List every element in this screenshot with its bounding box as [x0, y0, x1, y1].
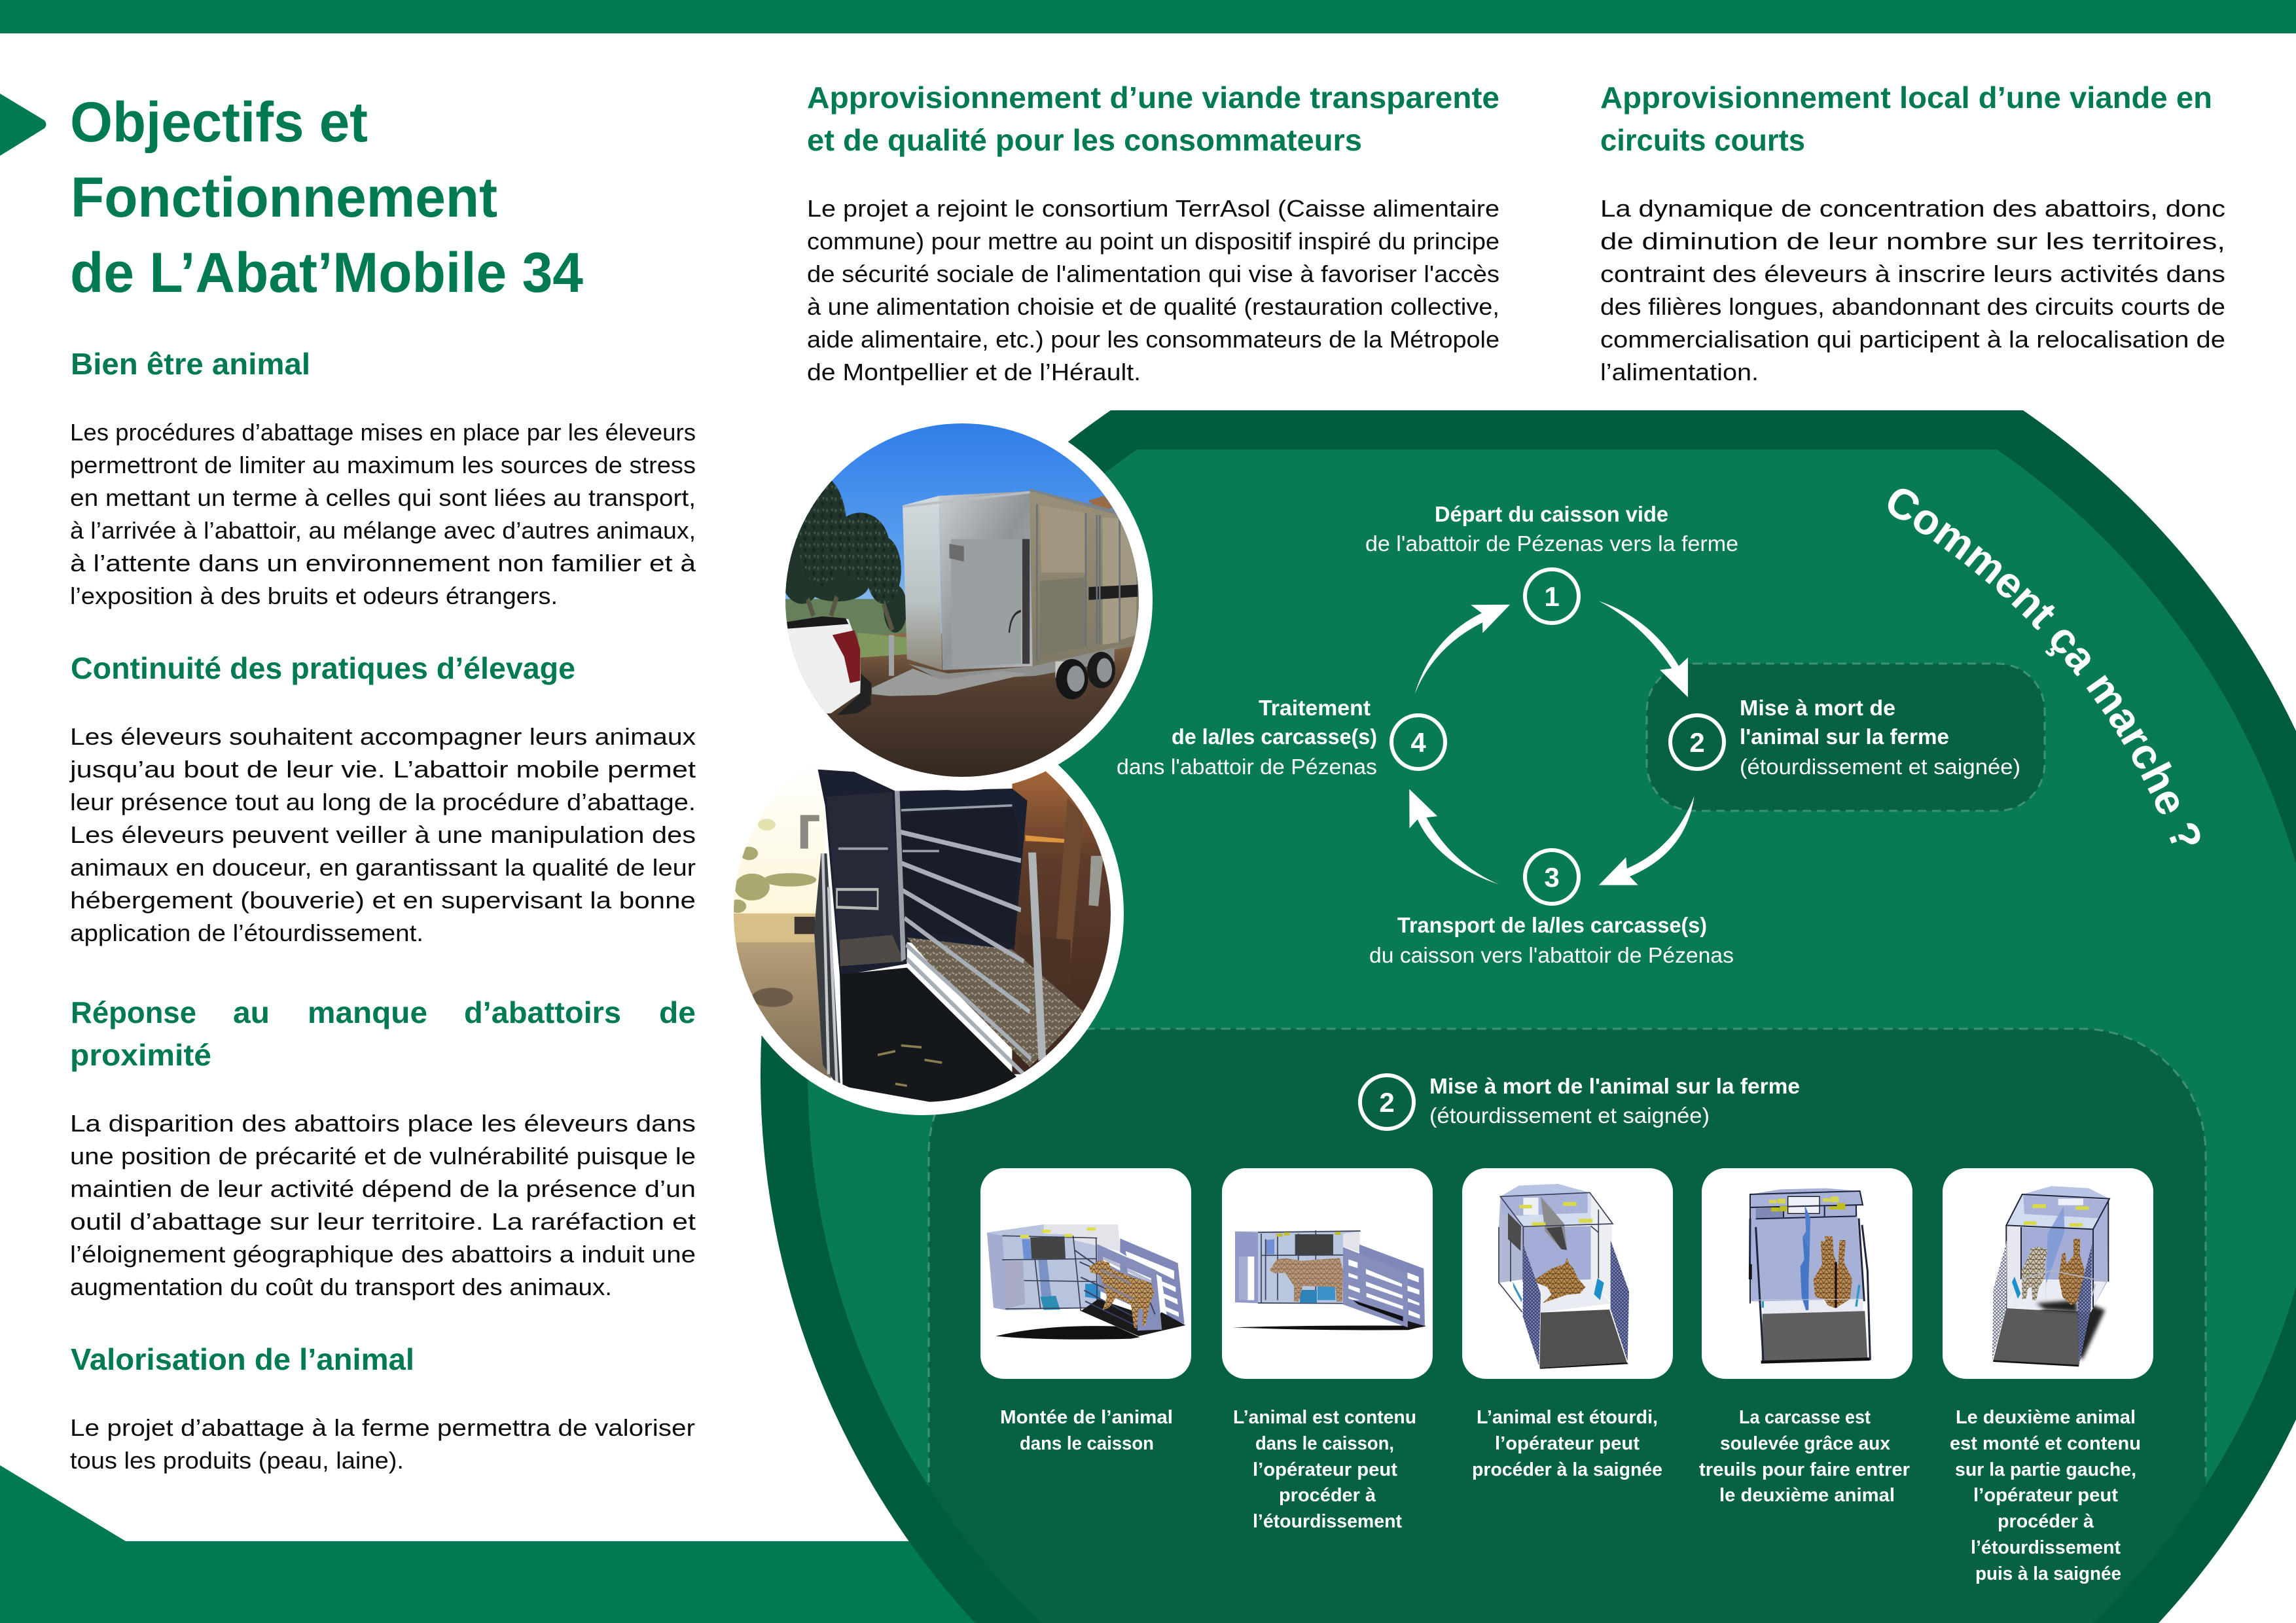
caption card 2: l’opérateur peut	[1253, 1459, 1397, 1480]
step 3 label: Transport de la/les carcasse(s)	[1397, 913, 1707, 937]
text block: continuité des pratiques: application de l’étourdissement.	[70, 919, 423, 946]
text block: bien être animal: l’exposition à des bruits et odeurs étrangers.	[70, 582, 558, 609]
heading: détail étape 2	[1360, 1074, 1800, 1129]
text block: bien être animal: en mettant un terme à celles qui sont liées au transport,	[70, 484, 696, 511]
text block: approvisionnement local: commercialisation qui participent à la relocalisation de	[1600, 326, 2225, 353]
heading: détail étape 2: (étourdissement et saignée)	[1429, 1103, 1710, 1128]
caption card 3	[1472, 1407, 1662, 1480]
caption card 2: L’animal est contenu	[1233, 1407, 1416, 1428]
step 1 label: Départ du caisson vide	[1435, 502, 1668, 526]
heading: approvisionnement local: circuits courts	[1600, 123, 1805, 157]
cycle diagram	[1117, 502, 2020, 967]
heading: réponse au manque d'abattoirs: au	[233, 995, 270, 1029]
text block: réponse au manque d'abattoirs: augmentation du coût du transport des animaux.	[70, 1274, 612, 1300]
text block: bien être animal: à l’arrivée à l’abattoir, au mélange avec d’autres animaux,	[70, 517, 696, 544]
text block: réponse au manque d'abattoirs: outil d’abattage sur leur territoire. La raréfaction et	[70, 1208, 696, 1235]
caption card 5: Le deuxième animal	[1956, 1407, 2136, 1428]
top green band	[0, 0, 2296, 33]
caption card 2: dans le caisson,	[1255, 1433, 1394, 1454]
heading: bien être animal: Bien être animal	[71, 347, 310, 381]
panel: comment ça marche background disc	[761, 410, 2296, 1623]
step 1 badge: 1	[1544, 581, 1560, 612]
caption card 5: est monté et contenu	[1950, 1433, 2141, 1454]
step 4 label: dans l'abattoir de Pézenas	[1117, 755, 1377, 779]
step 4 label	[1117, 696, 1377, 779]
card 2: animal contenu	[1222, 1168, 1433, 1379]
title	[70, 91, 583, 304]
step 4 label: Traitement	[1259, 696, 1371, 720]
caption card 5: l’opérateur peut	[1973, 1485, 2118, 1506]
text block: approvisionnement transparent: Le projet a rejoint le consortium TerrAsol (Caisse alimentaire	[807, 195, 1499, 222]
text block: continuité des pratiques: leur présence tout au long de la procédure d’abattage.	[70, 789, 696, 815]
caption card 3: procéder à la saignée	[1472, 1459, 1662, 1480]
caption card 3: L’animal est étourdi,	[1477, 1407, 1658, 1428]
text block: continuité des pratiques: hébergement (bouverie) et en supervisant la bonne	[70, 887, 696, 914]
caption card 5: l’étourdissement	[1971, 1537, 2121, 1558]
heading: approvisionnement local: Approvisionnement local d’une viande en	[1600, 80, 2212, 115]
card 4: carcasse soulevée	[1702, 1168, 1912, 1379]
text block: approvisionnement local: des filières longues, abandonnant des circuits courts de	[1600, 293, 2225, 320]
heading: valorisation de l'animal: Valorisation de l’animal	[71, 1342, 414, 1376]
illustration: animal contenu dans le caisson	[1233, 1230, 1426, 1330]
heading: comment ça marche: Comment ça marche ?	[1888, 488, 2200, 844]
text block: réponse au manque d'abattoirs: La disparition des abattoirs place les éleveurs dans	[70, 1110, 696, 1137]
step 3 label	[1369, 913, 1734, 967]
caption card 4: La carcasse est	[1739, 1407, 1871, 1428]
text block: continuité des pratiques: Les éleveurs souhaitent accompagner leurs animaux	[70, 723, 696, 750]
step 2 badge	[1670, 715, 1724, 769]
caption card 1	[1000, 1407, 1173, 1454]
caption card 5	[1950, 1407, 2141, 1584]
text block: approvisionnement local	[1600, 195, 2225, 385]
caption card 1: Montée de l’animal	[1000, 1407, 1173, 1428]
step 1 label: de l'abattoir de Pézenas vers la ferme	[1365, 531, 1738, 556]
text block: bien être animal: Les procédures d’abattage mises en place par les éleveurs	[70, 419, 696, 446]
caption card 2: procéder à	[1279, 1485, 1376, 1506]
heading: détail étape 2: 2	[1379, 1087, 1395, 1118]
step 2 label: (étourdissement et saignée)	[1740, 755, 2020, 779]
caption card 4: treuils pour faire entrer	[1699, 1459, 1910, 1480]
title arrow marker	[0, 94, 46, 156]
step 2 label: l'animal sur la ferme	[1740, 724, 1949, 749]
caption card 2: l’étourdissement	[1253, 1511, 1402, 1532]
text block: approvisionnement local: contraint des éleveurs à inscrire leurs activités dans	[1600, 260, 2225, 287]
text block: valorisation de l'animal: tous les produits (peau, laine).	[70, 1447, 404, 1474]
text block: bien être animal	[70, 419, 696, 609]
illustration: animal montant dans le caisson	[987, 1224, 1185, 1340]
text block: réponse au manque d'abattoirs: l’éloignement géographique des abattoirs a induit une	[70, 1241, 696, 1268]
arrows between the cycle steps	[1409, 601, 1695, 885]
text block: continuité des pratiques: animaux en douceur, en garantissant la qualité de leur	[70, 854, 696, 881]
heading: réponse au manque d'abattoirs: Réponse	[71, 995, 196, 1029]
heading: détail étape 2: Mise à mort de l'animal sur la ferme	[1429, 1074, 1800, 1098]
illustration: animal étourdi au sol	[1499, 1184, 1629, 1369]
caption card 5: sur la partie gauche,	[1955, 1459, 2136, 1480]
text block: bien être animal: à l’attente dans un environnement non familier et à	[70, 550, 696, 577]
heading: approvisionnement transparent: et de qualité pour les consommateurs	[807, 123, 1362, 157]
text block: approvisionnement transparent: à une alimentation choisie et de qualité (restauration collective,	[807, 293, 1499, 320]
illustration: deuxième animal contenu à gauche	[1992, 1186, 2109, 1366]
text block: approvisionnement transparent: commune) pour mettre au point un dispositif inspiré du principe	[807, 228, 1499, 255]
card 1: montée de l'animal	[980, 1168, 1191, 1379]
panel: détail mise à mort	[929, 1029, 2206, 1623]
step 4 badge: 4	[1410, 727, 1426, 758]
text block: approvisionnement transparent: de Montpellier et de l’Hérault.	[807, 359, 1141, 385]
caption card 4: soulevée grâce aux	[1720, 1433, 1890, 1454]
heading: réponse au manque d'abattoirs: de	[659, 995, 696, 1029]
step 3 badge	[1525, 850, 1579, 904]
heading: réponse au manque d'abattoirs: manque	[308, 995, 427, 1029]
text block: approvisionnement transparent	[807, 195, 1499, 385]
heading: réponse au manque d'abattoirs	[70, 995, 696, 1072]
caption card 4	[1699, 1407, 1910, 1506]
text block: approvisionnement local: La dynamique de concentration des abattoirs, donc	[1600, 195, 2225, 222]
text block: approvisionnement local: l’alimentation.	[1600, 359, 1759, 385]
heading: réponse au manque d'abattoirs: proximité	[70, 1038, 211, 1072]
step 1 label	[1365, 502, 1738, 556]
text block: réponse au manque d'abattoirs: une position de précarité et de vulnérabilité puisque le	[70, 1143, 696, 1169]
title: Objectifs et	[70, 91, 368, 154]
text block: réponse au manque d'abattoirs	[70, 1110, 696, 1300]
heading: approvisionnement local	[1600, 80, 2212, 157]
caption card 5: procéder à	[1998, 1511, 2094, 1532]
heading: approvisionnement transparent: Approvisionnement d’une viande transparente	[807, 80, 1499, 115]
photo: intérieur du caisson	[734, 740, 1124, 1115]
title: Fonctionnement	[71, 166, 497, 229]
step 4 label: de la/les carcasse(s)	[1172, 724, 1377, 749]
text block: valorisation de l'animal: Le projet d’abattage à la ferme permettra de valoriser	[70, 1414, 695, 1441]
caption card 1: dans le caisson	[1020, 1433, 1154, 1454]
title: de L’Abat’Mobile 34	[70, 241, 583, 304]
highlight box: étape 2 du cycle	[1647, 664, 2045, 811]
bottom green band with diagonal corner	[0, 1465, 1178, 1623]
caption card 2	[1233, 1407, 1416, 1532]
step 2 label: Mise à mort de	[1740, 696, 1895, 720]
caption card 5: puis à la saignée	[1975, 1563, 2121, 1584]
heading: continuité des pratiques: Continuité des pratiques d’élevage	[71, 651, 575, 685]
step 2 label	[1740, 696, 2020, 779]
text block: réponse au manque d'abattoirs: maintien de leur activité dépend de la présence d’un	[70, 1175, 696, 1202]
step 4 badge	[1391, 715, 1445, 769]
step 3 label: du caisson vers l'abattoir de Pézenas	[1369, 943, 1734, 967]
text block: continuité des pratiques: jusqu’au bout de leur vie. L’abattoir mobile permet	[69, 756, 696, 783]
step 1 badge	[1525, 569, 1579, 623]
text block: continuité des pratiques	[69, 723, 696, 946]
heading: approvisionnement transparent	[807, 80, 1499, 157]
text block: bien être animal: permettront de limiter au maximum les sources de stress	[70, 452, 696, 478]
text block: valorisation de l'animal	[70, 1414, 695, 1474]
captions under the cards	[1000, 1407, 2141, 1584]
card 5: deuxième animal	[1943, 1168, 2153, 1379]
illustration: carcasse suspendue aux treuils	[1749, 1188, 1870, 1364]
caption card 4: le deuxième animal	[1719, 1485, 1895, 1506]
text block: approvisionnement local: de diminution de leur nombre sur les territoires,	[1600, 228, 2225, 255]
text block: approvisionnement transparent: aide alimentaire, etc.) pour les consommateurs de la Métropole	[807, 326, 1499, 353]
step 3 badge: 3	[1544, 862, 1560, 893]
text block: continuité des pratiques: Les éleveurs peuvent veiller à une manipulation des	[70, 821, 696, 848]
photo: caisson attelé au pick-up	[772, 410, 1153, 791]
step 2 badge: 2	[1689, 727, 1705, 758]
caption card 3: l’opérateur peut	[1495, 1433, 1640, 1454]
heading: réponse au manque d'abattoirs: d’abattoirs	[464, 995, 621, 1029]
card 3: animal étourdi	[1462, 1168, 1673, 1379]
text block: approvisionnement transparent: de sécurité sociale de l'alimentation qui vise à favoriser l'accès	[807, 260, 1499, 287]
